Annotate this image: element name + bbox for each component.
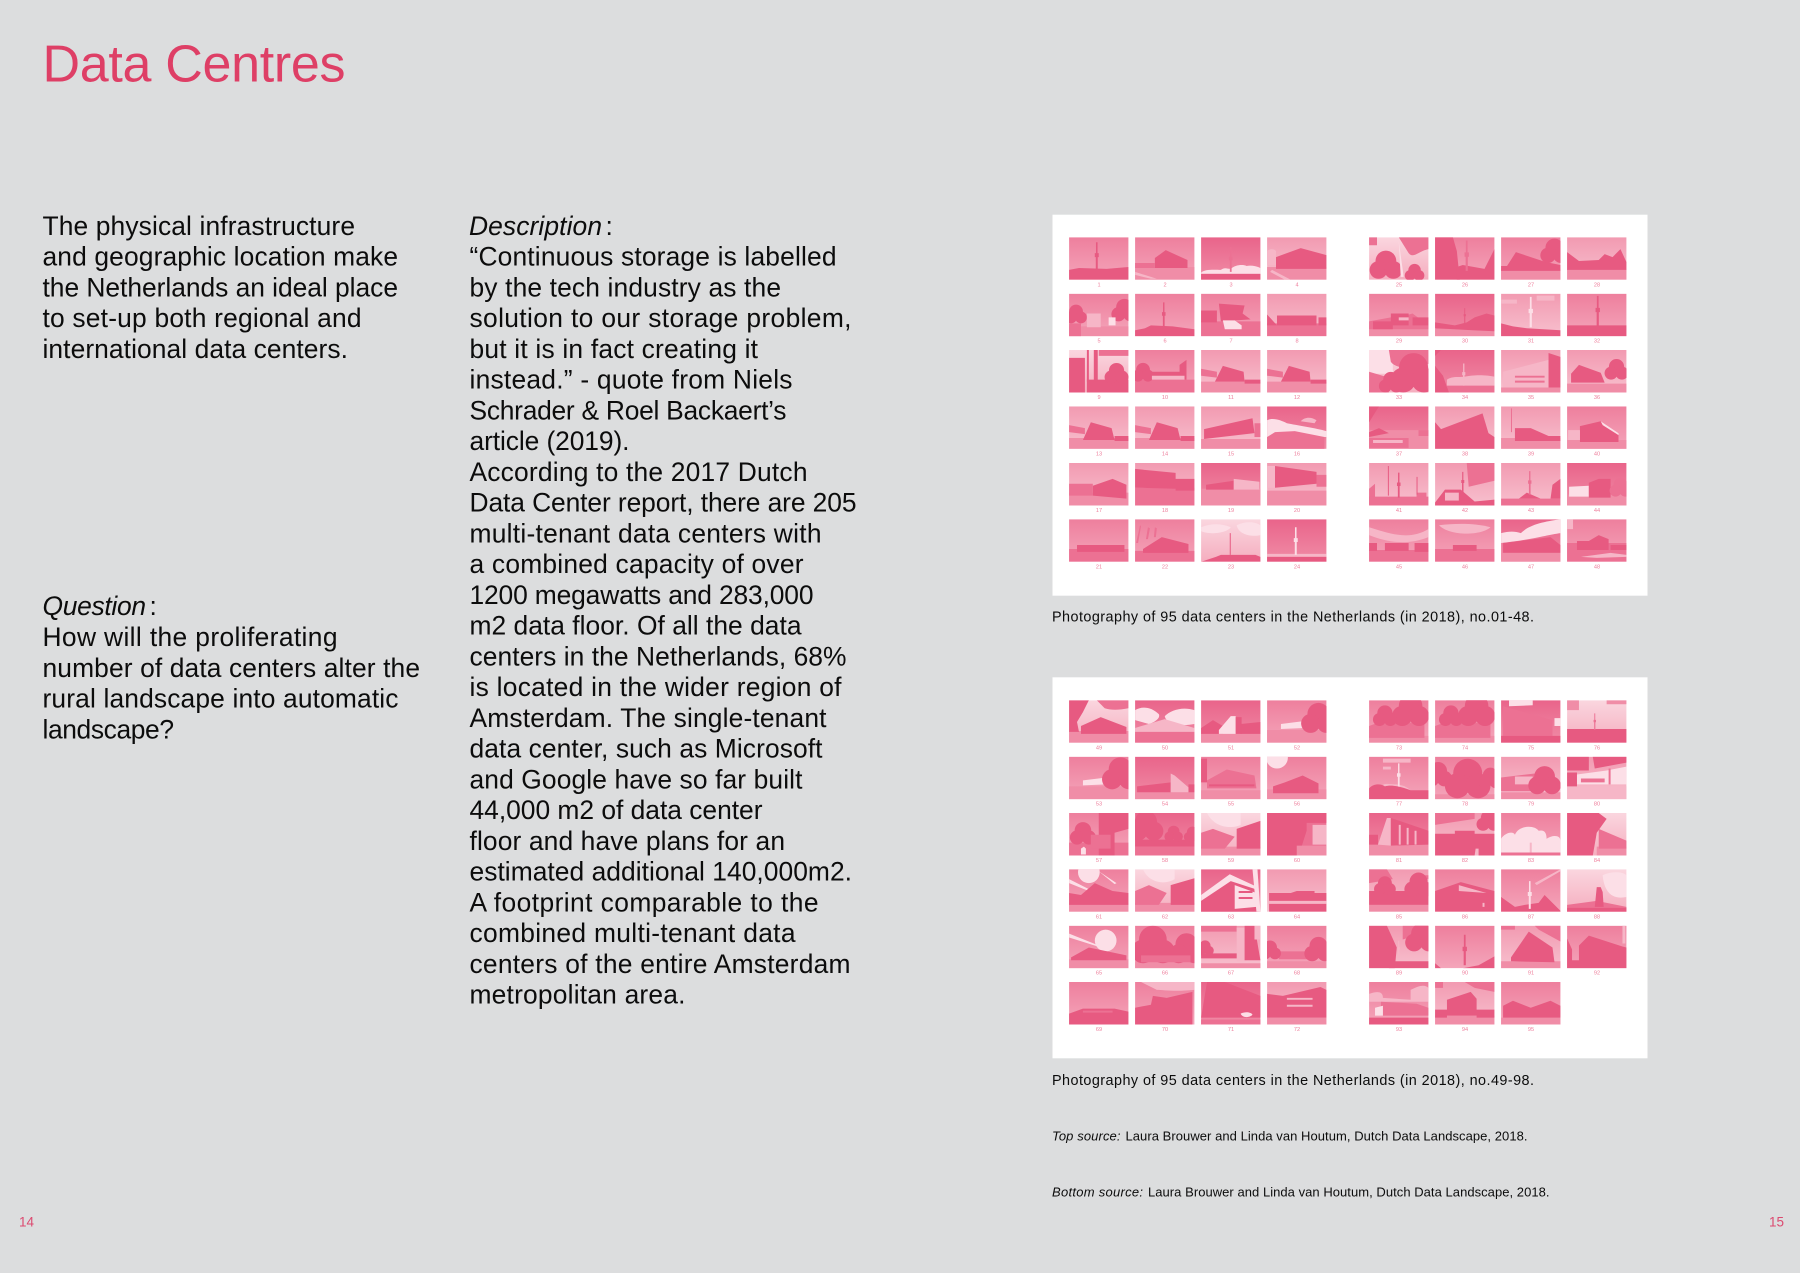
photo 48 (1567, 519, 1626, 570)
photo 13: 13 (1096, 451, 1102, 457)
photo 3: tower with clouds (1201, 237, 1260, 288)
photo 46 (1435, 519, 1494, 570)
photo 44 (1567, 463, 1631, 514)
text block: question: Question (42, 591, 146, 621)
text block: description: floor and have plans for an (470, 826, 785, 856)
photo 41: 41 (1396, 508, 1402, 514)
photo 86: 86 (1462, 914, 1468, 920)
source: bottom: Bottom source: (1052, 1185, 1143, 1200)
source: bottom: Laura Brouwer and Linda van Houtum, Dutch Data Landscape, 2018. (1148, 1185, 1550, 1200)
photo 63 (1201, 869, 1260, 920)
photo 20 (1267, 463, 1326, 514)
photo 71 (1201, 982, 1260, 1033)
photo 60 (1267, 813, 1326, 864)
photo 21: 21 (1096, 564, 1102, 570)
text block: introduction: and geographic location make (42, 242, 398, 272)
photo 4: office block (1267, 237, 1326, 288)
photo 93: 93 (1396, 1027, 1402, 1033)
photo 4: office block: 4 (1295, 282, 1299, 288)
photo 76: 76 (1594, 745, 1600, 751)
photo 43: 43 (1528, 508, 1534, 514)
photo 46: 46 (1462, 564, 1468, 570)
photo 72 (1267, 982, 1326, 1033)
photo 21 (1069, 519, 1128, 570)
photo 55 (1201, 757, 1260, 808)
source: top: Top source: (1052, 1129, 1121, 1144)
photo 59: 59 (1228, 858, 1234, 864)
text block: question: landscape? (42, 714, 174, 744)
text block: description: instead.” - quote from Niels (470, 365, 792, 395)
photo 58 (1129, 811, 1201, 864)
text block: description: Description (469, 211, 602, 241)
text block: description: 1200 megawatts and 283,000 (470, 580, 814, 610)
photo 30 (1435, 294, 1494, 345)
photo 73: 73 (1396, 745, 1402, 751)
text block: introduction: to set-up both regional and (42, 303, 362, 333)
photo 27: 27 (1528, 282, 1534, 288)
photo 58: 58 (1162, 858, 1168, 864)
text block: description: multi-tenant data centers with (470, 518, 822, 548)
photo 23: 23 (1228, 564, 1234, 570)
photo 75: 75 (1528, 745, 1534, 751)
photo 65 (1069, 926, 1128, 977)
text block: description: is located in the wider region of (470, 672, 842, 702)
photo 50 (1135, 700, 1194, 751)
photo 49: 49 (1096, 745, 1102, 751)
photo 55: 55 (1228, 802, 1234, 808)
photo 66: 66 (1162, 971, 1168, 977)
panel: photo grid no. 49-95 (1052, 677, 1648, 1058)
photo 67: 67 (1228, 971, 1234, 977)
photo 23 (1201, 519, 1260, 570)
photo 82: 82 (1462, 858, 1468, 864)
photo 89: 89 (1396, 971, 1402, 977)
photo 47: 47 (1528, 564, 1534, 570)
photo 9: trees (1069, 350, 1128, 401)
photo 28: 28 (1594, 282, 1600, 288)
photo 38: 38 (1462, 451, 1468, 457)
photo 88 (1567, 869, 1626, 920)
photo 35: 35 (1528, 395, 1534, 401)
photo 11 (1201, 350, 1260, 401)
photo 61 (1069, 861, 1128, 920)
photo 68 (1259, 926, 1333, 977)
photo 35 (1501, 350, 1560, 401)
photo 77 (1369, 757, 1428, 808)
photo 93 (1369, 982, 1428, 1033)
photo 1: tower: 1 (1097, 282, 1101, 288)
photo 56: 56 (1294, 802, 1300, 808)
photo 49 (1069, 700, 1128, 751)
photo 25 (1369, 237, 1428, 288)
photo 12 (1267, 350, 1326, 401)
photo 73 (1369, 694, 1429, 751)
photo 59 (1201, 813, 1260, 864)
photo 78 (1424, 757, 1502, 808)
text block: description: : (606, 211, 613, 241)
text block: description: Amsterdam. The single-tenant (470, 703, 827, 733)
photo 85: 85 (1396, 914, 1402, 920)
photo 29 (1369, 294, 1428, 345)
photo 69: 69 (1096, 1027, 1102, 1033)
photo 53: 53 (1096, 802, 1102, 808)
photo 53 (1069, 757, 1139, 808)
photo 86 (1435, 869, 1494, 920)
photo 26: 26 (1462, 282, 1468, 288)
photo 7: 7 (1229, 339, 1233, 345)
photo 16 (1267, 406, 1326, 457)
photo 13 (1069, 406, 1128, 457)
photo 44: 44 (1594, 508, 1600, 514)
text block: description: 44,000 m2 of data center (470, 795, 763, 825)
photo 64: 64 (1294, 914, 1300, 920)
text block: question: How will the proliferating (42, 622, 338, 652)
photo 45: 45 (1396, 564, 1402, 570)
photo 14: 14 (1162, 451, 1168, 457)
panel: photo grid no. 01-48 (1052, 215, 1648, 596)
text block: introduction: The physical infrastructure (42, 211, 355, 241)
caption: top grid: Photography of 95 data centers in the Netherlands (in 2018), no.01-48. (1052, 610, 1534, 626)
photo 82 (1435, 810, 1500, 864)
photo 87 (1501, 869, 1560, 920)
text block: question (42, 591, 420, 744)
text block: description: A footprint comparable to the (470, 888, 818, 918)
photo 90 (1435, 926, 1494, 977)
photo 37 (1369, 406, 1428, 457)
photo 91: 91 (1528, 971, 1534, 977)
photo 61: 61 (1096, 914, 1102, 920)
photo 5 (1065, 294, 1137, 345)
page number: left: 14 (19, 1214, 35, 1230)
photo 69 (1069, 982, 1128, 1033)
photo 5: 5 (1097, 339, 1101, 345)
text block: description: combined multi-tenant data (470, 918, 796, 948)
photo 56 (1266, 747, 1326, 808)
photo 52 (1267, 700, 1336, 751)
photo 36 (1567, 350, 1628, 401)
page number: right: 15 (1769, 1214, 1784, 1230)
photo 39: 39 (1528, 451, 1534, 457)
photo 43 (1501, 463, 1560, 514)
photo 84 (1567, 813, 1626, 864)
photo 77: 77 (1396, 802, 1402, 808)
photo 60: 60 (1294, 858, 1300, 864)
photo 54 (1135, 757, 1194, 808)
photo 28 (1567, 237, 1626, 288)
photo 41 (1369, 463, 1428, 514)
photo 42 (1435, 463, 1494, 514)
photo 7 (1201, 294, 1260, 345)
source: top: Laura Brouwer and Linda van Houtum, Dutch Data Landscape, 2018. (1126, 1129, 1528, 1144)
photo 94: 94 (1462, 1027, 1468, 1033)
photo 64 (1267, 869, 1326, 920)
photo 72: 72 (1294, 1027, 1300, 1033)
photo 74 (1435, 694, 1495, 751)
text block: description: centers of the entire Amsterdam (470, 949, 850, 979)
photo 2: hall: 2 (1163, 282, 1167, 288)
photo 29: 29 (1396, 339, 1402, 345)
photo 80: 80 (1594, 802, 1600, 808)
photo 85 (1369, 869, 1433, 920)
photo 26 (1435, 237, 1494, 288)
title: Data Centres (42, 36, 346, 94)
photo 39 (1501, 406, 1560, 457)
text block: description: and Google have so far built (470, 764, 803, 794)
text block: question: : (150, 591, 157, 621)
photo 8: 8 (1295, 339, 1299, 345)
photo 45 (1369, 519, 1428, 570)
text block: description: m2 data floor. Of all the data (470, 611, 802, 641)
photo 57: 57 (1096, 858, 1102, 864)
photo 25: 25 (1396, 282, 1402, 288)
photo 40 (1567, 406, 1626, 457)
photo 2: hall (1135, 237, 1194, 288)
text block: description (469, 211, 856, 1010)
photo 18: 18 (1162, 508, 1168, 514)
photo 24: 24 (1294, 564, 1300, 570)
photo 70: 70 (1162, 1027, 1168, 1033)
photo 90: 90 (1462, 971, 1468, 977)
photo 17: 17 (1096, 508, 1102, 514)
photo 37: 37 (1396, 451, 1402, 457)
text block: introduction: the Netherlands an ideal place (42, 272, 398, 302)
photo 10 (1132, 350, 1194, 401)
photo 42: 42 (1462, 508, 1468, 514)
photo 79: 79 (1528, 802, 1534, 808)
photo 83: 83 (1528, 858, 1534, 864)
photo 51: 51 (1228, 745, 1234, 751)
photo 76 (1567, 700, 1626, 751)
text block: question: rural landscape into automatic (42, 684, 398, 714)
photo 63: 63 (1228, 914, 1234, 920)
photo 80 (1567, 757, 1626, 808)
text block: description: data center, such as Microsoft (470, 734, 823, 764)
photo 6: tower: 6 (1163, 339, 1167, 345)
photo 84: 84 (1594, 858, 1600, 864)
photo 32: 32 (1594, 339, 1600, 345)
photo 19 (1201, 463, 1260, 514)
photo 38 (1435, 406, 1494, 457)
photo 16: 16 (1294, 451, 1300, 457)
photo 48: 48 (1594, 564, 1600, 570)
text block: description: “Continuous storage is labelled (470, 242, 836, 272)
photo 34 (1435, 350, 1494, 401)
photo 92 (1567, 926, 1626, 977)
photo 36: 36 (1594, 395, 1600, 401)
text block: description: centers in the Netherlands, 68% (470, 642, 846, 672)
photo 32 (1567, 294, 1626, 345)
photo 50: 50 (1162, 745, 1168, 751)
photo 22 (1135, 519, 1194, 570)
photo 8 (1267, 294, 1326, 345)
photo 74: 74 (1462, 745, 1468, 751)
photo 10: 10 (1162, 395, 1168, 401)
photo 89 (1369, 923, 1438, 977)
photo 11: 11 (1228, 395, 1234, 401)
photo 34: 34 (1462, 395, 1468, 401)
photo 12: 12 (1294, 395, 1300, 401)
photo 52: 52 (1294, 745, 1300, 751)
photo 17 (1069, 463, 1128, 514)
text block: description: According to the 2017 Dutch (470, 457, 808, 487)
photo 31 (1501, 294, 1560, 345)
photo 65: 65 (1096, 971, 1102, 977)
caption: bottom grid: Photography of 95 data centers in the Netherlands (in 2018), no.49-98. (1052, 1073, 1534, 1089)
photo 95: 95 (1528, 1027, 1534, 1033)
photo 15: 15 (1228, 451, 1234, 457)
photo 88: 88 (1594, 914, 1600, 920)
photo 54: 54 (1162, 802, 1168, 808)
photo 94 (1435, 982, 1494, 1033)
photo 40: 40 (1594, 451, 1600, 457)
photo 95 (1501, 982, 1560, 1033)
text block: description: but it is in fact creating it (470, 334, 759, 364)
text block: description: estimated additional 140,000m2. (470, 857, 852, 887)
photo 31: 31 (1528, 339, 1534, 345)
photo 3: tower with clouds: 3 (1229, 282, 1233, 288)
photo 83 (1501, 813, 1560, 864)
photo 92: 92 (1594, 971, 1600, 977)
text block: description: a combined capacity of over (470, 549, 804, 579)
photo 81: 81 (1396, 858, 1402, 864)
photo 30: 30 (1462, 339, 1468, 345)
photo 78: 78 (1462, 802, 1468, 808)
photo 62: 62 (1162, 914, 1168, 920)
text block: introduction (42, 211, 398, 364)
photo 47 (1501, 519, 1560, 570)
photo 27 (1501, 237, 1569, 288)
text block: question: number of data centers alter the (42, 653, 420, 683)
text block: description: metropolitan area. (470, 980, 686, 1010)
photo 15 (1201, 406, 1260, 457)
photo 1: tower (1069, 237, 1128, 288)
photo 18 (1135, 463, 1194, 514)
photo 87: 87 (1528, 914, 1534, 920)
photo 22: 22 (1162, 564, 1168, 570)
photo 57 (1069, 813, 1128, 864)
photo 19: 19 (1228, 508, 1234, 514)
photo 9: trees: 9 (1097, 395, 1101, 401)
text block: description: Schrader & Roel Backaert’s (470, 396, 786, 426)
photo 79 (1501, 757, 1561, 808)
photo 6: tower (1135, 294, 1194, 345)
text block: description: Data Center report, there are 205 (470, 488, 856, 518)
photo 24 (1267, 519, 1326, 570)
photo 51 (1201, 700, 1260, 751)
text block: description: article (2019). (470, 426, 630, 456)
photo 33 (1369, 350, 1436, 401)
photo 70 (1135, 982, 1194, 1033)
photo 66 (1131, 926, 1204, 977)
photo 81 (1369, 813, 1428, 864)
photo 14 (1135, 406, 1194, 457)
photo 68: 68 (1294, 971, 1300, 977)
photo 67 (1196, 926, 1260, 977)
text block: description: by the tech industry as the (470, 272, 781, 302)
photo 20: 20 (1294, 508, 1300, 514)
photo 62 (1135, 869, 1194, 920)
photo 33: 33 (1396, 395, 1402, 401)
photo 71: 71 (1228, 1027, 1234, 1033)
text block: introduction: international data centers. (42, 334, 348, 364)
photo 91 (1501, 926, 1560, 977)
photo 75 (1501, 700, 1560, 751)
text block: description: solution to our storage problem, (470, 303, 852, 333)
